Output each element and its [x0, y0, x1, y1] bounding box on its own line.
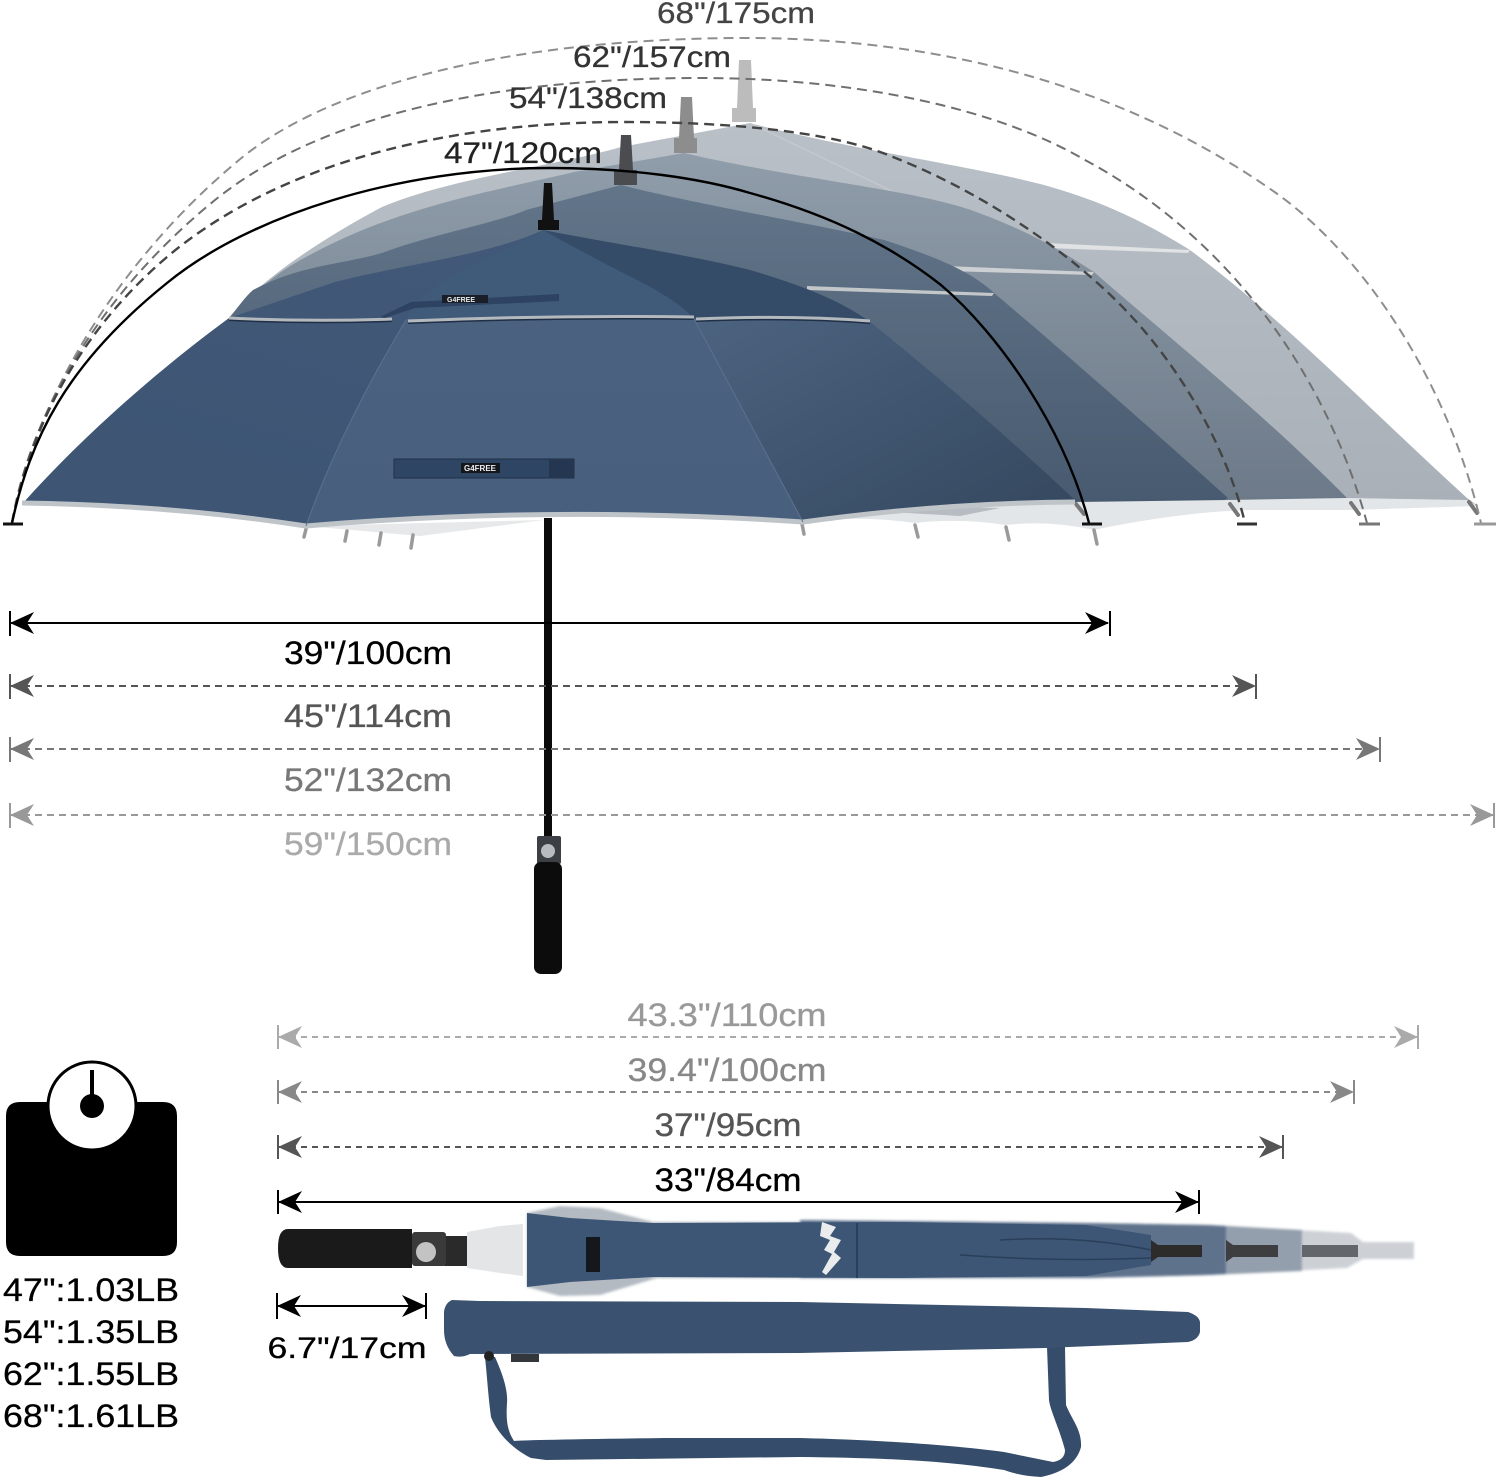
open width dimension: 39 inch: 39"/100cm: [284, 635, 452, 671]
closed length dimension: 43.3 inch: [278, 997, 1418, 1049]
closed length dimension: 39.4 inch: [278, 1052, 1354, 1104]
weight list: 54":1.35LB: [3, 1314, 179, 1350]
ghost fan folds: [527, 1206, 800, 1296]
closed length dimension: 39.4 inch: 39.4"/100cm: [628, 1052, 826, 1088]
folds white: [467, 1224, 523, 1276]
open width dimension: 59 inch: [10, 803, 1494, 862]
arc labels: [444, 0, 815, 170]
ferrule 62: [674, 97, 697, 153]
handle length dimension: [268, 1293, 426, 1365]
strap with logo lower: G4FREE: [464, 464, 497, 473]
arc labels: 62"/157cm: [573, 41, 731, 74]
umbrella canopy: 62 inch size: [229, 97, 1347, 505]
scale icon: [6, 1062, 177, 1256]
handle length dimension: 6.7"/17cm: [268, 1332, 426, 1365]
weight list: [3, 1272, 179, 1434]
arc: 47 inch: [12, 168, 1089, 523]
open width dimension: 59 inch: 59"/150cm: [284, 826, 452, 862]
closed length dimension: 43.3 inch: 43.3"/110cm: [628, 997, 826, 1033]
umbrella canopy: 54 inch size: [229, 135, 1228, 505]
weight list: 68":1.61LB: [3, 1398, 179, 1434]
closed length dimension: 33 inch: [278, 1162, 1199, 1214]
open width dimension: 52 inch: 52"/132cm: [284, 762, 452, 798]
strap with logo lower: [394, 459, 574, 478]
umbrella canopy: 68 inch size: [229, 60, 1478, 506]
closed umbrella: [278, 1206, 1414, 1296]
arc labels: 54"/138cm: [509, 82, 667, 115]
arc labels: 47"/120cm: [444, 137, 602, 170]
canopy underside and rim tips: [304, 498, 1478, 548]
arc: 68 inch: [12, 38, 1481, 523]
closed length dimension: 37 inch: 37"/95cm: [654, 1107, 802, 1143]
carry sleeve: [444, 1300, 1200, 1477]
ferrule 54: [614, 135, 637, 185]
open width dimension: 52 inch: [10, 737, 1380, 798]
strap with logo upper: G4FREE: [447, 297, 475, 304]
closed tips: [1151, 1240, 1202, 1262]
open width dimension: 45 inch: [10, 674, 1256, 734]
closed length dimension: 33 inch: 33"/84cm: [654, 1162, 802, 1198]
ferrule 68: [732, 60, 756, 122]
closed logo tag: [586, 1237, 600, 1272]
umbrella canopy: 47 inch main: [22, 183, 1075, 526]
arc end ticks: [3, 522, 1496, 526]
ghost body tones: [800, 1220, 1414, 1278]
open width dimension: 39 inch: [10, 611, 1110, 671]
strap with logo upper: [380, 294, 559, 318]
shaft and handle: [534, 518, 562, 974]
closed length dimension: 37 inch: [278, 1107, 1283, 1159]
open width dimension: 45 inch: 45"/114cm: [284, 698, 452, 734]
weight list: 62":1.55LB: [3, 1356, 179, 1392]
weight list: 47":1.03LB: [3, 1272, 179, 1308]
ferrule 47: [538, 183, 559, 230]
reflective rim: [22, 502, 1075, 526]
closed handle: [278, 1229, 412, 1268]
arc: 62 inch: [12, 78, 1367, 523]
arc: 54 inch: [12, 122, 1245, 523]
